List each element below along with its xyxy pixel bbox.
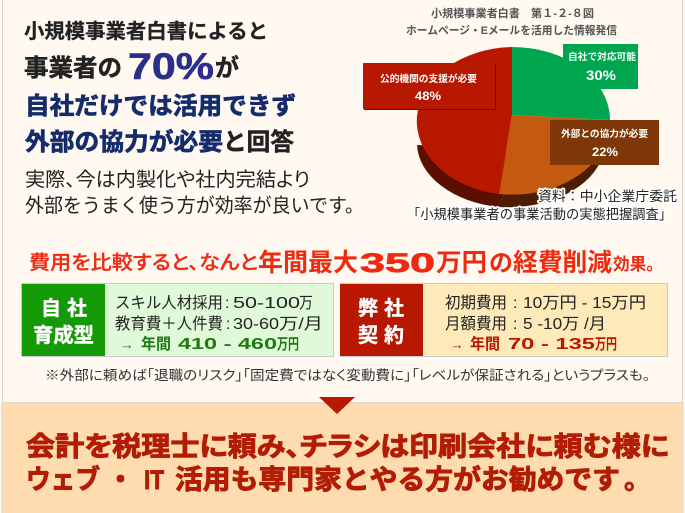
in-house costs: → xyxy=(120,337,134,352)
label: 30%: 30% xyxy=(586,67,617,83)
in-house costs: 410 - 460 xyxy=(178,336,277,353)
heading: white paper finding: 70% xyxy=(128,46,214,87)
note: additional benefits: ※外部に頼めば「退職のリスク」「固定費ではなく変動費に」「レベルが保証される」というプラスも。 xyxy=(45,368,650,383)
in-house costs: 教育費＋人件費 xyxy=(115,315,223,333)
headline: cost comparison: 年間最大 xyxy=(258,249,358,277)
source note: 「小規模事業者の事業活動の実態把握調査」 xyxy=(407,207,672,222)
in-house costs: スキル人材採用 xyxy=(115,294,223,312)
headline: cost comparison: 350 xyxy=(360,248,435,278)
headline: cost comparison: 費用を比較すると、なんと xyxy=(29,252,258,274)
in-house costs: : xyxy=(225,295,229,312)
our costs: 万円 xyxy=(595,336,617,353)
in-house costs: 万 xyxy=(299,295,313,312)
conclusion text: IT xyxy=(144,465,164,495)
text block: explanation xyxy=(25,169,364,217)
heading: white paper finding: 事業者の xyxy=(24,55,122,82)
label: 48%: 公的機関の支援が必要 xyxy=(380,73,477,85)
heading: white paper finding: 小規模事業者白書によると xyxy=(24,20,268,43)
text block: explanation: 外部をうまく使う方が効率が良いです。 xyxy=(25,195,364,217)
in-house costs: 年間 xyxy=(141,334,171,353)
conclusion text: 活用も専門家とやる方がお勧めです xyxy=(175,464,620,495)
label: 22%: 外部との協力が必要 xyxy=(561,128,649,140)
in-house costs: : xyxy=(226,316,230,333)
conclusion text: 会計を税理士に頼み、チラシは印刷会社に頼む様に xyxy=(26,432,669,462)
in-house costs xyxy=(115,294,323,353)
heading: white paper finding: が xyxy=(215,54,239,82)
our costs xyxy=(445,294,646,353)
our costs: : xyxy=(513,316,517,333)
in-house costs: 30-60 xyxy=(233,316,279,333)
our costs: 初期費用 xyxy=(445,294,507,312)
panel: conclusion xyxy=(2,397,683,513)
label: 48%: 48% xyxy=(415,89,441,103)
chart title: 小規模事業者白書 第１-２-８図 xyxy=(431,6,594,20)
our costs: 5 -10万 /月 xyxy=(523,316,606,333)
arrow: down xyxy=(319,397,355,414)
heading: white paper finding: 自社だけでは活用できず xyxy=(25,93,296,120)
heading: white paper finding: と回答 xyxy=(223,129,294,156)
label: in-house training: 育成型 xyxy=(33,323,94,347)
label: 48% xyxy=(363,63,496,110)
chart title xyxy=(406,6,617,37)
label: our contract: 契 約 xyxy=(358,324,404,347)
source note: 資料：中小企業庁委託 xyxy=(538,189,678,204)
source note xyxy=(407,189,678,222)
pie chart xyxy=(363,44,659,207)
panel: in-house xyxy=(22,284,334,356)
text block: explanation: 実際、今は内製化や社内完結より xyxy=(25,169,310,191)
in-house costs: 50-100 xyxy=(233,295,300,312)
label: in-house training: 自 社 xyxy=(41,297,87,320)
label: in-house training xyxy=(22,284,105,356)
headline: cost comparison: 効果。 xyxy=(613,255,663,274)
conclusion text: ・ xyxy=(107,465,134,495)
label: 22% xyxy=(550,120,659,165)
heading: white paper finding: 外部の協力が必要 xyxy=(25,128,223,156)
heading: white paper finding xyxy=(24,20,296,156)
our costs: → xyxy=(450,337,464,352)
in-house costs: 万円 xyxy=(277,336,299,353)
our costs: 70 - 135 xyxy=(508,336,596,353)
conclusion text: ウェブ xyxy=(26,464,100,495)
conclusion text: 。 xyxy=(624,465,651,495)
our costs: 月額費用 xyxy=(445,315,507,333)
panel: our contract xyxy=(340,284,668,356)
label: 30%: 自社で対応可能 xyxy=(568,51,636,63)
chart title: ホームページ・Eメールを活用した情報発信 xyxy=(406,23,617,37)
headline: cost comparison: 万円 xyxy=(436,249,487,277)
our costs: 10万円 - 15万円 xyxy=(523,295,646,312)
conclusion text xyxy=(26,432,669,495)
label: 30% xyxy=(563,44,638,89)
label: 22%: 22% xyxy=(592,145,618,159)
in-house costs: 万/月 xyxy=(279,316,323,333)
headline: cost comparison xyxy=(29,248,663,278)
label: our contract xyxy=(340,284,423,356)
headline: cost comparison: 経費削減 xyxy=(513,249,612,277)
our costs: : xyxy=(513,295,517,312)
our costs: 年間 xyxy=(470,334,500,353)
label: our contract: 弊 社 xyxy=(358,297,404,320)
headline: cost comparison: の xyxy=(489,250,513,277)
